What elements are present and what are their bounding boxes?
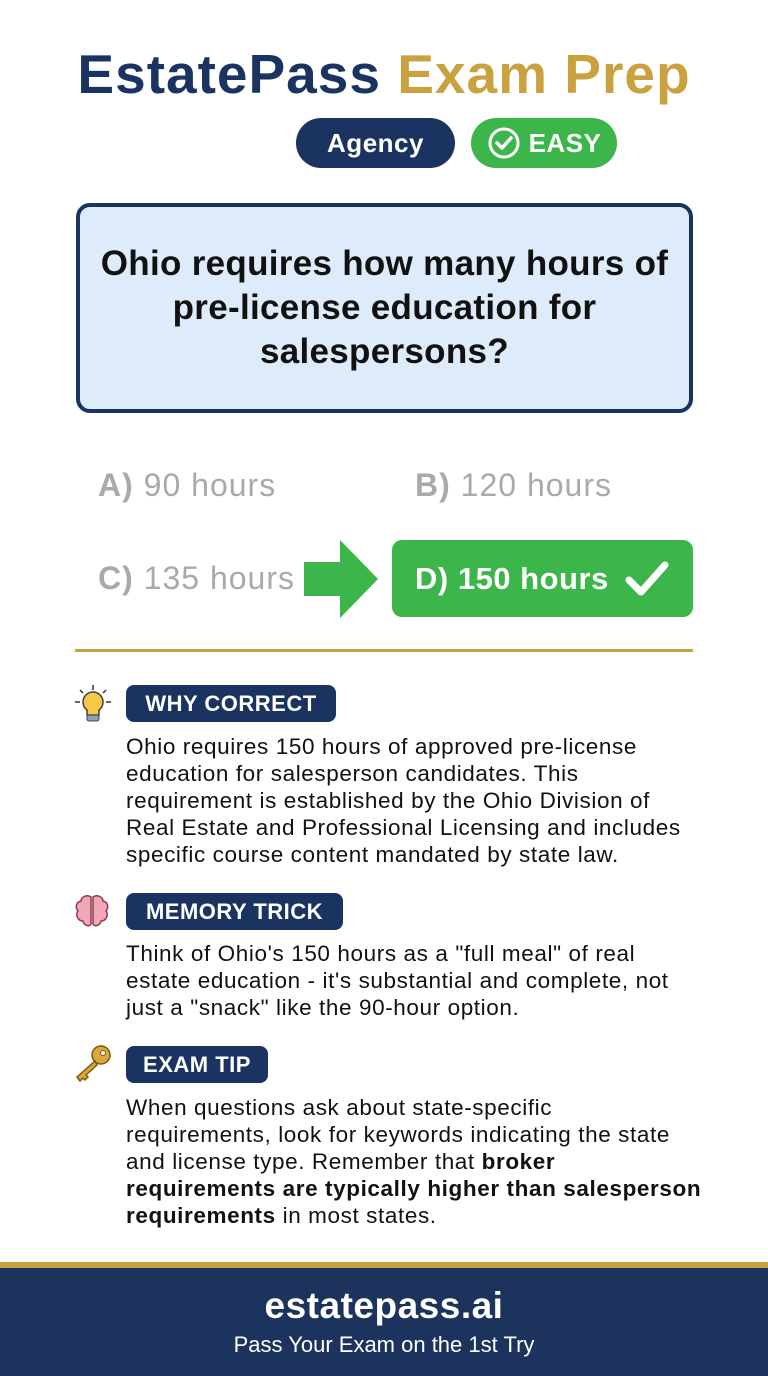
- icon: check circle: [488, 128, 520, 158]
- correct option D: D) 150 hours: [415, 560, 609, 596]
- text: exam tip: requirements are typically higher than salesperson: [126, 1176, 701, 1201]
- option B: B) 120 hours: [415, 467, 612, 503]
- icon: key: [76, 1045, 111, 1082]
- icon: brain: [76, 895, 108, 926]
- text: memory trick: just a "snack" like the 90-hour option.: [126, 995, 519, 1020]
- pill: EASY: [471, 118, 617, 168]
- icon: check: [626, 562, 668, 596]
- text: memory trick: [125, 941, 669, 1020]
- title: EstatePass Exam Prep: [77, 43, 691, 105]
- footer brand: estatepass.ai: [265, 1285, 503, 1326]
- heading: memory trick: MEMORY TRICK: [146, 898, 323, 924]
- text: why correct: Ohio requires 150 hours of approved pre-license: [126, 734, 637, 759]
- option C: C) 135 hours: [98, 560, 295, 596]
- heading: exam tip: EXAM TIP: [143, 1052, 251, 1076]
- text: memory trick: estate education - it's substantial and complete, not: [126, 968, 669, 993]
- option A: A) 90 hours: [98, 467, 276, 503]
- heading: memory trick: [126, 893, 343, 930]
- text: why correct: education for salesperson candidates. This: [126, 761, 579, 786]
- text: why correct: requirement is established by the Ohio Division of: [126, 788, 650, 813]
- text: exam tip: [126, 1095, 701, 1228]
- text: exam tip: requirements, look for keywords indicating the state: [126, 1122, 670, 1147]
- icon: lightbulb: [75, 685, 111, 722]
- pill: Agency: Agency: [327, 128, 424, 158]
- correct option D: [392, 540, 693, 617]
- question box: salespersons?: [260, 332, 509, 371]
- text: why correct: specific course content mandated by state law.: [126, 842, 619, 867]
- arrow: [304, 540, 378, 618]
- question box: [76, 203, 693, 413]
- question box: pre-license education for: [173, 288, 596, 327]
- text: why correct: Real Estate and Professional Licensing and includes: [126, 815, 681, 840]
- heading: why correct: WHY CORRECT: [145, 690, 317, 716]
- question box: Ohio requires how many hours of: [101, 244, 668, 283]
- text: exam tip: requirements in most states.: [126, 1203, 437, 1228]
- text: memory trick: Think of Ohio's 150 hours as a "full meal" of real: [126, 941, 635, 966]
- pill: Agency: [296, 118, 455, 168]
- text: exam tip: and license type. Remember that broker: [126, 1149, 555, 1174]
- text: exam tip: When questions ask about state-specific: [126, 1095, 552, 1120]
- heading: why correct: [126, 685, 336, 722]
- footer tagline: Pass Your Exam on the 1st Try: [234, 1332, 534, 1357]
- pill: EASY: EASY: [529, 128, 601, 158]
- heading: exam tip: [126, 1046, 268, 1083]
- footer: [0, 1262, 768, 1376]
- text: why correct: [126, 734, 681, 867]
